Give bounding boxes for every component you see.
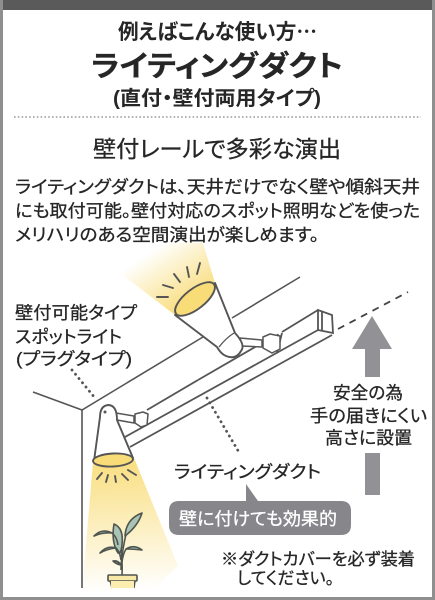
height note: 手の届きにくい <box>310 406 427 426</box>
light beam: lower spotlight <box>82 458 178 592</box>
label: plug-type spotlight: 壁付可能タイプ <box>15 303 138 323</box>
body text: メリハリのある空間演出が楽しめます。 <box>15 225 319 245</box>
low leaf <box>113 561 121 565</box>
label: plug-type spotlight: (プラグタイプ) <box>16 349 132 369</box>
wall and ceiling lines <box>33 277 300 588</box>
left mid leaf <box>100 547 116 553</box>
lamp opening <box>93 452 133 468</box>
label: plug-type spotlight: スポットライト <box>15 327 122 347</box>
callout: 壁に付けても効果的 <box>179 509 337 529</box>
note: ※ダクトカバーを必ず装着 <box>221 550 415 569</box>
heading: intro line: 例えばこんな使い方… <box>118 16 317 46</box>
lamp arm <box>116 413 134 423</box>
arrow: lower shaft <box>365 453 380 495</box>
note: してください。 <box>237 569 334 588</box>
title: ライティングダクト <box>91 49 343 83</box>
body text <box>15 177 420 245</box>
duct rail <box>125 310 333 447</box>
callout <box>169 484 351 535</box>
light rays: upper <box>157 263 200 297</box>
upper right leaf <box>125 513 142 536</box>
lamp arm <box>240 338 262 347</box>
label: lighting duct: ライティングダクト <box>174 462 321 482</box>
light beam: upper spotlight <box>120 243 215 315</box>
height note <box>310 383 427 448</box>
subtitle: (直付・壁付両用タイプ) <box>113 87 321 110</box>
upper spotlight <box>170 276 280 357</box>
leader line: duct <box>207 398 240 454</box>
pot <box>110 580 135 588</box>
label: plug-type spotlight <box>15 303 138 369</box>
height note: 安全の為 <box>333 383 403 403</box>
lower spotlight <box>93 405 148 468</box>
height note: 高さに設置 <box>325 428 412 448</box>
body text: にも取付可能。壁付対応のスポット照明などを使った <box>15 201 420 221</box>
stem <box>118 530 127 576</box>
lamp body <box>175 283 243 357</box>
arrow: up <box>352 316 392 377</box>
light rays: lower <box>97 470 136 482</box>
dashed height line <box>338 292 408 329</box>
leader line: spotlight <box>72 370 95 398</box>
potted plant <box>94 513 142 588</box>
plug <box>263 334 280 353</box>
lamp body <box>94 405 133 461</box>
note <box>221 550 415 588</box>
body text: ライティングダクトは、天井だけでなく壁や傾斜天井 <box>15 177 420 197</box>
section heading: 壁付レールで多彩な演出 <box>93 136 341 162</box>
left upper leaf <box>94 531 112 536</box>
lamp opening <box>170 276 220 322</box>
plug <box>135 412 148 427</box>
central leaf <box>113 524 122 553</box>
right mid leaf <box>126 547 142 550</box>
